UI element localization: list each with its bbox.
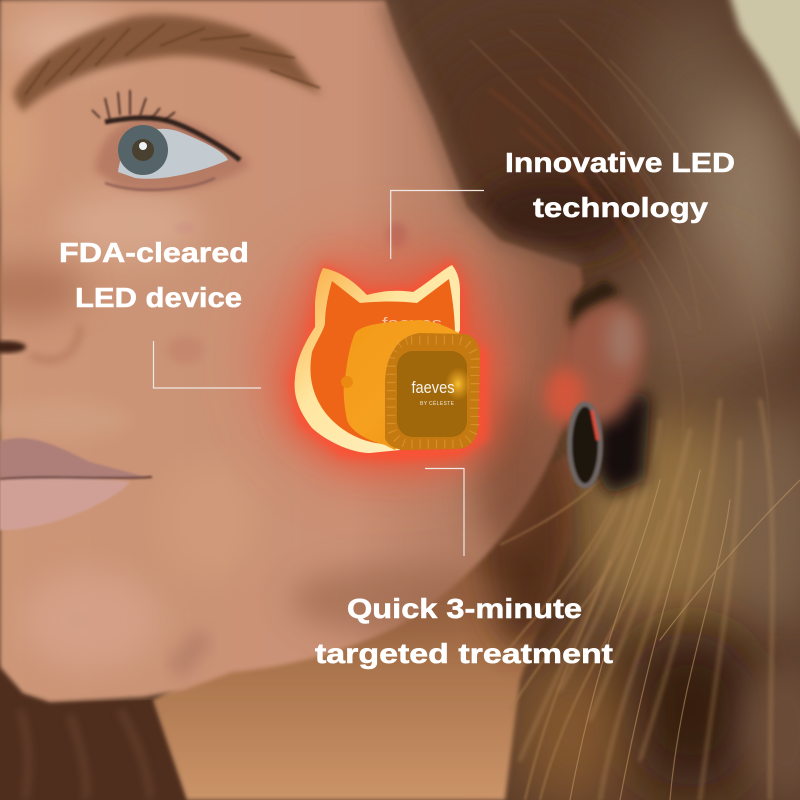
cube front [385,333,480,450]
cube side [344,320,470,450]
callout: FDA-cleared LED device: FDA-cleared [59,237,249,268]
cube nub [341,376,353,388]
ghost logo on ring: faeves [382,315,442,332]
eye [92,90,250,191]
callout: FDA-cleared LED device: LED device [75,282,242,313]
callout: quick 3-minute targeted treatment [315,468,613,669]
hair strands over neck [500,480,660,800]
cat ring inner [310,279,455,444]
front ridges [391,340,475,444]
callout: quick 3-minute targeted treatment: Quick 3-minute [347,593,582,624]
logo subtext: BY CÉLESTE [420,400,455,407]
callout: innovative LED technology: technology [533,192,708,223]
callout: FDA-cleared LED device [59,237,261,388]
neck [153,450,575,800]
background wall [728,0,800,145]
callout: innovative LED technology [391,147,735,259]
cat ring outer [295,265,460,453]
left lower hair [0,660,187,800]
cat-shaped LED device [295,265,480,453]
nose [0,325,80,360]
logo: faeves [412,378,454,397]
eyebrow [13,15,322,112]
hairline soft edge [385,0,580,267]
hair colour masses and strands [410,10,800,800]
ear [545,280,650,495]
face skin [0,0,583,702]
red light glow on skin [260,240,510,480]
lips [0,438,152,530]
callout: quick 3-minute targeted treatment: targeted treatment [315,638,613,669]
neck shadow near hair [480,430,570,650]
hoop earring [570,404,600,486]
skin light and shadow modelling [0,10,545,672]
callout: innovative LED technology: Innovative LED [505,147,735,178]
front panel [397,351,467,437]
